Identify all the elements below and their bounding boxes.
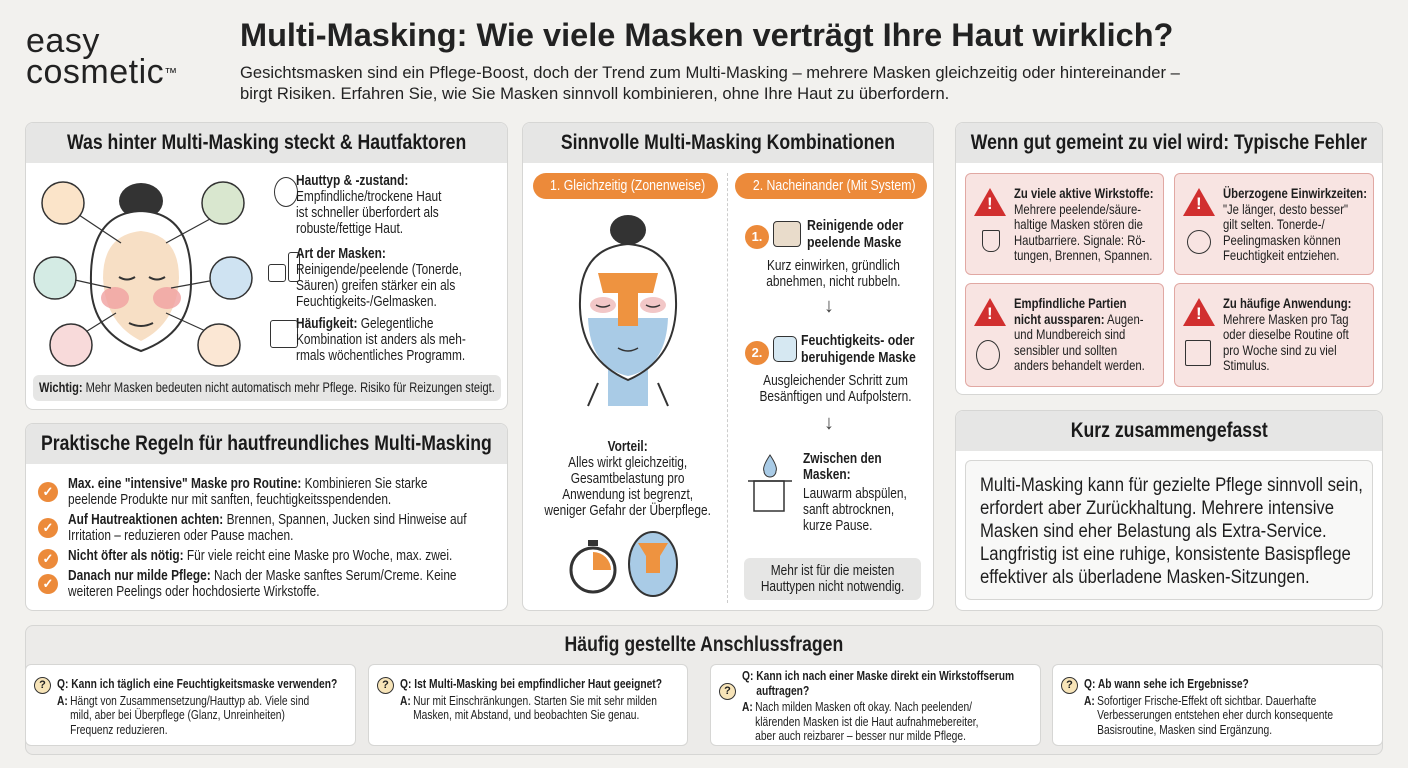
summary text	[965, 460, 1373, 600]
step 2: beruhigende Maske	[801, 349, 916, 366]
text: vorteil	[544, 439, 711, 519]
subtitle: birgt Risiken. Erfahren Sie, wie Sie Masken sinnvoll kombinieren, ohne Ihre Haut zu überfordern.	[240, 84, 949, 103]
panel: kurz zusammengefasst	[955, 410, 1383, 611]
error: anwendung: oder dieselbe Routine oft	[1223, 327, 1349, 342]
factor: art der masken	[268, 246, 462, 310]
faq card 1: Hängt von Zusammensetzung/Hauttyp ab. Viele sind	[70, 694, 309, 708]
faq card 3: auftragen?	[756, 684, 809, 698]
text: vorteil: weniger Gefahr der Überpflege.	[544, 503, 711, 519]
factor: hauttyp: Empfindliche/trockene Haut	[296, 189, 441, 205]
step 2: Besänftigen und Aufpolstern.	[759, 389, 912, 405]
panel: kombinationen: kurze Pause.	[803, 518, 872, 534]
pill: nacheinander	[735, 173, 927, 199]
step 1: Reinigende oder	[807, 217, 903, 234]
summary text: erfordert aber Zurückhaltung. Mehrere intensive	[980, 498, 1334, 519]
heading	[26, 123, 507, 163]
summary text: Masken sind eher Belastung als Extra-Service.	[980, 521, 1327, 542]
factor: haeufigkeit	[270, 316, 466, 364]
illustration: zoned face	[578, 215, 678, 406]
summary text: effektiver als überladene Masken-Sitzungen.	[980, 567, 1310, 588]
error: wirkstoffe: haltige Masken stören die	[1014, 217, 1143, 232]
error: partien: Empfindliche Partien	[1014, 296, 1127, 311]
faq card 2	[368, 664, 688, 746]
step 1: 1.	[752, 229, 762, 244]
rule list	[38, 476, 467, 600]
step: zwischen den masken	[748, 454, 792, 512]
faq card 3: aber auch reizbarer – besser nur milde Pflege.	[755, 729, 966, 743]
factor: art der masken: Art der Masken:	[296, 246, 386, 262]
pill: gleichzeitig	[533, 173, 718, 199]
rule list: Nicht öfter als nötig: Für viele reicht eine Maske pro Woche, max. zwei.	[68, 548, 452, 564]
step 2: Ausgleichender Schritt zum	[763, 373, 908, 389]
text: vorteil: Anwendung ist begrenzt,	[562, 487, 693, 503]
factor: hauttyp: robuste/fettige Haut.	[296, 221, 403, 237]
heading: Praktische Regeln für hautfreundliches Multi-Masking	[41, 432, 492, 455]
factor: haeufigkeit: rmals wöchentliches Programm.	[296, 348, 465, 364]
rule list: Auf Hautreaktionen achten: Brennen, Spannen, Jucken sind Hinweise auf	[68, 512, 467, 528]
summary text: Multi-Masking kann für gezielte Pflege sinnvoll sein,	[980, 475, 1363, 496]
error: anwendung: pro Woche sind zu viel	[1223, 342, 1337, 358]
error: anwendung: Mehrere Masken pro Tag	[1223, 312, 1349, 326]
rule list: ✓	[43, 484, 53, 499]
rule list: Max. eine "intensive" Maske pro Routine: Kombinieren Sie starke	[68, 476, 428, 492]
rule list: ✓	[43, 520, 53, 535]
error: partien: nicht aussparen: Augen-	[1014, 312, 1144, 326]
faq card 1: mild, aber bei Überpflege (Glanz, Unreinheiten)	[70, 708, 285, 722]
heading: Kurz zusammengefasst	[1070, 419, 1268, 442]
error: einwirkzeiten	[1174, 173, 1374, 275]
step 2: 2.	[752, 345, 762, 360]
faq card 1: ?	[39, 679, 46, 691]
callout: mehr ist nicht notwendig: Hauttypen nicht notwendig.	[761, 579, 904, 595]
step 2	[745, 332, 916, 405]
error: wirkstoffe: tungen, Brennen, Spannen.	[1014, 248, 1152, 263]
faq card 3	[710, 664, 1041, 746]
factor: art der masken: Säuren) greifen stärker ein als	[296, 278, 455, 294]
faq card 2: Masken, mit Abstand, und beobachten Sie genau.	[413, 708, 639, 722]
error: einwirkzeiten: Überzogene Einwirkzeiten:	[1223, 186, 1367, 201]
heading	[956, 123, 1382, 163]
error: einwirkzeiten: gilt selten. Tonerde-/	[1223, 217, 1325, 232]
heading: Wenn gut gemeint zu viel wird: Typische Fehler	[971, 131, 1367, 154]
error: einwirkzeiten: "Je länger, desto besser"	[1223, 202, 1348, 216]
panel: kombinationen: sanft abtrocknen,	[803, 502, 894, 518]
error: partien: anders behandelt werden.	[1014, 358, 1145, 373]
rule list: weiteren Peelings oder hochdosierte Wirkstoffe.	[68, 584, 320, 600]
faq card 1: A:	[57, 694, 68, 708]
faq card 2: ?	[382, 679, 389, 691]
subtitle: Gesichtsmasken sind ein Pflege-Boost, doch der Trend zum Multi-Masking – mehrere Masken gleichzeitig oder hintereinander –	[240, 63, 1180, 82]
heading: Sinnvolle Multi-Masking Kombinationen	[561, 131, 895, 154]
heading	[523, 123, 933, 163]
callout: wichtig: Wichtig: Mehr Masken bedeuten nicht automatisch mehr Pflege. Risiko für Reizungen steigt.	[39, 380, 495, 395]
faq card 4: Q: Ab wann sehe ich Ergebnisse?	[1084, 677, 1249, 691]
error: anwendung: Stimulus.	[1223, 358, 1270, 373]
factor: hauttyp: ist schneller überfordert als	[296, 205, 439, 221]
faq card 3: Q: Kann ich nach einer Maske direkt ein Wirkstoffserum	[742, 669, 1014, 683]
faq card 4: Sofortiger Frische-Effekt oft sichtbar. Dauerhafte	[1097, 694, 1316, 708]
text: vorteil: Alles wirkt gleichzeitig,	[568, 455, 687, 471]
faq card 1: Q: Kann ich täglich eine Feuchtigkeitsmaske verwenden?	[57, 677, 337, 691]
rule list: Danach nur milde Pflege: Nach der Maske sanftes Serum/Creme. Keine	[68, 568, 457, 584]
faq card 4: ?	[1066, 679, 1073, 691]
heading	[956, 411, 1382, 451]
step 1: peelende Maske	[807, 234, 901, 251]
factor: hauttyp: Hauttyp & -zustand:	[296, 173, 408, 189]
callout: wichtig	[33, 375, 501, 401]
faq card 3: Nach milden Masken oft okay. Nach peelenden/	[755, 700, 972, 714]
error: partien: und Mundbereich sind	[1014, 327, 1125, 342]
faq card 1: Frequenz reduzieren.	[70, 722, 168, 736]
callout: mehr ist nicht notwendig: Mehr ist für die meisten	[771, 563, 894, 579]
faq card 3: A:	[742, 700, 753, 714]
rule list: Irritation – reduzieren oder Pause machen.	[68, 528, 293, 544]
rule list: ✓	[43, 576, 53, 591]
step 1	[745, 217, 904, 290]
error: wirkstoffe: Hautbarriere. Signale: Rö-	[1014, 232, 1145, 248]
panel: kombinationen	[522, 122, 934, 611]
pill: nacheinander: 2. Nacheinander (Mit System)	[753, 177, 916, 194]
error: partien: sensibler und sollten	[1014, 342, 1117, 358]
summary text: Langfristig ist eine ruhige, konsistente Basispflege	[980, 544, 1351, 565]
text: vorteil: Gesamtbelastung pro	[571, 471, 684, 487]
panel: hintergrund & hautfaktoren	[25, 122, 508, 410]
step 1: Kurz einwirken, gründlich	[767, 258, 900, 274]
heading	[26, 424, 507, 464]
error: einwirkzeiten: Peelingmasken können	[1223, 232, 1341, 248]
faq card 3: ?	[724, 685, 731, 697]
faq card 2: A:	[400, 694, 411, 708]
logo: easy	[26, 22, 100, 60]
logo: cosmetic™	[26, 53, 178, 91]
step 1: abnehmen, nicht rubbeln.	[766, 274, 900, 290]
error: wirkstoffe: Mehrere peelende/säure-	[1014, 202, 1141, 216]
heading: Häufig gestellte Anschlussfragen	[565, 633, 843, 656]
error: wirkstoffe: Zu viele aktive Wirkstoffe:	[1014, 186, 1153, 201]
illustration: face with mask icons	[33, 181, 253, 367]
faq card 2: Q: Ist Multi-Masking bei empfindlicher Haut geeignet?	[400, 677, 662, 691]
faq card 4	[1052, 664, 1383, 746]
subtitle	[240, 63, 1180, 103]
icon: stopwatch and mask	[570, 531, 678, 597]
text: vorteil: Vorteil:	[608, 439, 648, 455]
error: einwirkzeiten: Feuchtigkeit entziehen.	[1223, 248, 1339, 263]
factor: art der masken: Reinigende/peelende (Tonerde,	[296, 262, 462, 278]
factor: haeufigkeit: Kombination ist anders als meh-	[296, 332, 466, 348]
faq card 4: A:	[1084, 694, 1095, 708]
error: anwendung: Zu häufige Anwendung:	[1223, 296, 1351, 311]
faq card 4: Verbesserungen entstehen eher durch konsequente	[1097, 708, 1333, 722]
panel: faq	[25, 625, 1383, 755]
factor: art der masken: Feuchtigkeits-/Gelmasken.	[296, 294, 437, 310]
panel: kombinationen: Lauwarm abspülen,	[803, 486, 907, 502]
error: anwendung	[1174, 283, 1374, 387]
panel: kombinationen: Masken:	[803, 467, 851, 483]
factor: hauttyp	[274, 173, 442, 237]
panel: praktische regeln	[25, 423, 508, 611]
rule list: peelende Produkte nur mit sanften, feuchtigkeitsspendenden.	[68, 492, 391, 508]
faq card 4: Basisroutine, Masken sind Ergänzung.	[1097, 722, 1272, 736]
faq card 3: klärenden Masken ist die Haut aufnahmebereiter,	[755, 714, 978, 728]
arrow: ↓	[824, 412, 834, 434]
panel: typische fehler	[955, 122, 1383, 395]
callout: mehr ist nicht notwendig	[744, 558, 921, 600]
faq card 1	[25, 664, 356, 746]
step 2: Feuchtigkeits- oder	[801, 332, 914, 349]
factor: haeufigkeit: Häufigkeit: Gelegentliche	[296, 316, 433, 332]
rule list: ✓	[43, 551, 53, 566]
pill: gleichzeitig: 1. Gleichzeitig (Zonenweise)	[550, 177, 705, 194]
error: partien	[965, 283, 1164, 387]
error: wirkstoffe	[965, 173, 1164, 275]
arrow: ↓	[824, 295, 834, 317]
heading: Was hinter Multi-Masking steckt & Hautfaktoren	[67, 131, 466, 154]
title: Multi-Masking: Wie viele Masken verträgt Ihre Haut wirklich?	[240, 17, 1173, 53]
logo	[26, 22, 178, 91]
faq card 2: Nur mit Einschränkungen. Starten Sie mit sehr milden	[413, 694, 657, 708]
panel: kombinationen: Zwischen den	[803, 451, 882, 467]
